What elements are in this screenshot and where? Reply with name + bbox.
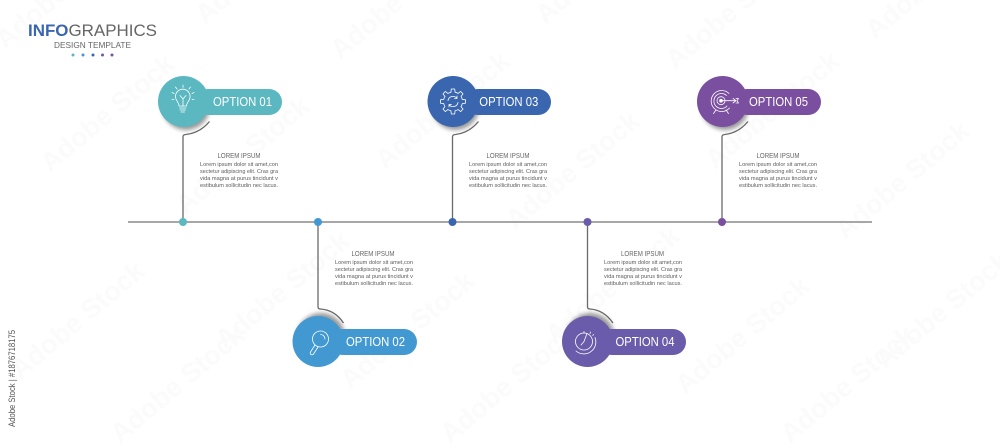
- text: Adobe Stock: [500, 105, 646, 235]
- title dots: [72, 54, 114, 56]
- text block 04: LOREM IPSUM: [621, 251, 664, 258]
- text block 01: estibulum sollicitudin nec lacus.: [200, 183, 278, 189]
- option 01: [158, 76, 282, 226]
- text block 02: sectetur adipiscing elit. Cras gra: [335, 267, 414, 273]
- text: Adobe Stock: [370, 45, 516, 175]
- text block 02: [335, 251, 414, 287]
- text block 05: vida magna at purus tincidunt v: [739, 176, 817, 182]
- text block 04: Lorem ipsum dolor sit amet,con: [604, 260, 682, 266]
- shadow 04: [566, 313, 614, 361]
- timeline marker 05: [718, 218, 726, 226]
- badge 04: [562, 316, 686, 367]
- timeline marker 02: [314, 218, 322, 226]
- text block 03: Lorem ipsum dolor sit amet,con: [469, 162, 547, 168]
- icon: magnifying glass: [310, 331, 328, 355]
- icon: gear: [440, 89, 466, 114]
- text block 03: LOREM IPSUM: [486, 153, 530, 160]
- text block 02: estibulum sollicitudin nec lacus.: [335, 281, 413, 287]
- text block 04: sectetur adipiscing elit. Cras gra: [604, 267, 683, 273]
- option 05: [697, 76, 821, 226]
- connector 04: [588, 222, 613, 323]
- timeline marker 03: [448, 218, 456, 226]
- title block: [28, 21, 157, 56]
- label 04: OPTION 04: [616, 335, 674, 349]
- text block 05: Lorem ipsum dolor sit amet,con: [739, 162, 817, 168]
- text block 05: estibulum sollicitudin nec lacus.: [739, 183, 817, 189]
- text: Adobe Stock: [170, 90, 316, 220]
- text block 03: vida magna at purus tincidunt v: [469, 176, 547, 182]
- text: Adobe Stock: [540, 220, 686, 350]
- text block 02: vida magna at purus tincidunt v: [335, 274, 413, 280]
- option 04: [562, 218, 686, 367]
- icon: light bulb: [172, 85, 194, 112]
- badge 02: [292, 316, 417, 367]
- text block 04: vida magna at purus tincidunt v: [604, 274, 682, 280]
- connector 05: [722, 122, 748, 222]
- text block 05: [739, 153, 818, 189]
- shadow 03: [432, 82, 480, 130]
- stock image id: Adobe Stock | #1876718175: [7, 330, 18, 427]
- badge 01: [158, 76, 282, 127]
- text: Adobe Stock: [5, 255, 151, 385]
- text block 02: Lorem ipsum dolor sit amet,con: [335, 260, 413, 266]
- text: Adobe Stock: [670, 270, 816, 400]
- text block 01: LOREM IPSUM: [218, 153, 261, 160]
- timeline marker 04: [584, 218, 592, 226]
- connector 01: [183, 122, 210, 222]
- text block 05: sectetur adipiscing elit. Cras gra: [739, 169, 818, 175]
- timeline marker 01: [179, 218, 187, 226]
- text block 03: estibulum sollicitudin nec lacus.: [469, 183, 547, 189]
- option 03: [428, 76, 551, 226]
- label 05: OPTION 05: [749, 95, 808, 109]
- text: Adobe Stock: [830, 115, 976, 245]
- option 02: [292, 218, 417, 367]
- title: INFOGRAPHICS: [28, 21, 157, 40]
- icon: target with arrow: [711, 91, 738, 114]
- connector 02: [318, 222, 344, 323]
- text block 03: [469, 153, 548, 189]
- shadow 02: [297, 313, 345, 361]
- icon: stopwatch: [576, 332, 596, 354]
- connector 03: [452, 122, 478, 222]
- label 02: OPTION 02: [346, 335, 405, 349]
- text block 01: vida magna at purus tincidunt v: [200, 176, 278, 182]
- label 03: OPTION 03: [479, 95, 538, 109]
- badge 05: [697, 76, 821, 127]
- badge 03: [428, 76, 551, 127]
- shadow 01: [162, 82, 210, 130]
- text block 01: sectetur adipiscing elit. Cras gra: [200, 169, 279, 175]
- text: Adobe Stock: [35, 48, 181, 178]
- text block 02: LOREM IPSUM: [352, 251, 395, 258]
- text block 03: sectetur adipiscing elit. Cras gra: [469, 169, 548, 175]
- label 01: OPTION 01: [213, 95, 272, 109]
- text block 01: Lorem ipsum dolor sit amet,con: [200, 162, 278, 168]
- subtitle: DESIGN TEMPLATE: [54, 40, 131, 50]
- timeline axis: [128, 221, 872, 223]
- text block 01: [200, 153, 279, 189]
- text: Adobe Stock: [335, 265, 481, 395]
- text block 04: [604, 251, 683, 287]
- text: Adobe Stock: [700, 45, 846, 175]
- text block 04: estibulum sollicitudin nec lacus.: [604, 281, 682, 287]
- shadow 05: [701, 82, 749, 130]
- text block 05: LOREM IPSUM: [756, 153, 800, 160]
- text: Adobe Stock: [210, 225, 356, 355]
